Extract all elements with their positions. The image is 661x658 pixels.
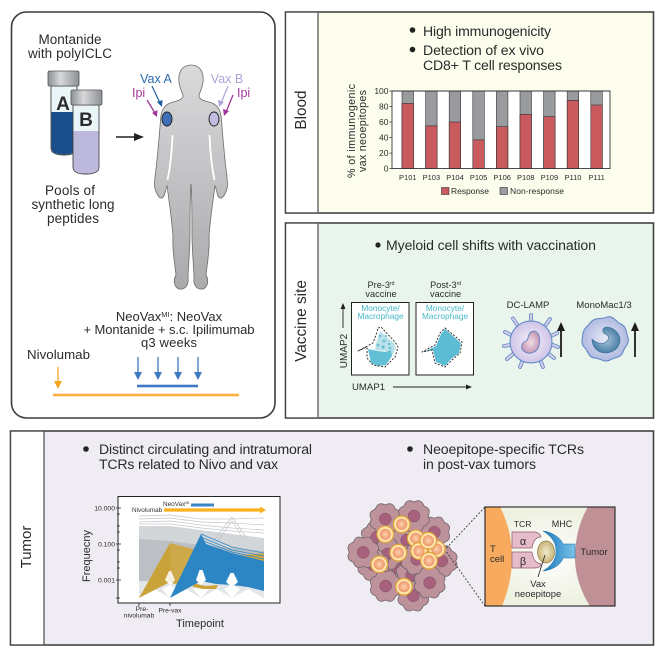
axis: y tick labels: 20 [379, 148, 389, 158]
label: schedule: q3 weeks [141, 335, 198, 350]
axis: x labels: Pre-vax [158, 608, 182, 614]
bullet text: CD8 detection: CD8+ T cell responses [423, 57, 562, 73]
icon: injection site B [209, 112, 219, 126]
axis: y tick labels [374, 86, 389, 174]
axis: UMAP2: UMAP2 [339, 333, 350, 368]
panel: vaccine site [286, 223, 654, 418]
axis: x labels: P101 [399, 173, 417, 182]
label: post-3rd vaccine: vaccine [430, 289, 461, 299]
receptor: TCR alpha: α [520, 536, 527, 548]
molecule: vax neoepitope [538, 541, 554, 563]
label: vax neoepitope: Vax [530, 578, 546, 589]
axis: x labels: P110 [565, 173, 581, 182]
plot: UMAP post: Monocyte/ [426, 303, 465, 313]
bullet text: CD8 detection: Detection of ex vivo [423, 42, 544, 58]
label: pre-3rd vaccine [365, 280, 397, 299]
label: NeoVaxMI regimen: MI [161, 310, 170, 319]
panel: blood [286, 12, 654, 213]
timeline: NeoVax bar: MI [185, 501, 189, 505]
icon: human body [154, 65, 228, 289]
axis: x labels: P111 [588, 173, 605, 182]
label: post-3rd vaccine: rd [457, 281, 461, 287]
label: MHC: MHC [552, 519, 573, 529]
axis: x labels: P103 [423, 173, 440, 182]
label: TCR: TCR [514, 519, 531, 529]
axis: x labels: Pre- [136, 606, 148, 613]
axis: UMAP2 [339, 303, 350, 368]
axis: y tick labels: 0.100 [98, 542, 115, 548]
label: polyICLC: with polyICLC [27, 46, 112, 61]
arrow: Ipi left [147, 100, 158, 117]
timeline: NeoVax bar: NeoVax [163, 501, 185, 508]
arrow: nivolumab start [54, 367, 62, 389]
cell: T cell: cell [490, 554, 504, 565]
bullet text: neoepitope TCRs [407, 441, 584, 472]
label: MonoMac1/3: MonoMac1/3 [576, 300, 632, 311]
axis: x labels: P108 [517, 173, 535, 182]
label: Vax B: Vax B [211, 72, 243, 86]
label: montanide: Montanide [38, 32, 102, 47]
label: synthetic long: synthetic long [32, 197, 114, 212]
label: pools: Pools of [45, 183, 95, 198]
bullet text: distinct TCRs [83, 441, 312, 472]
timeline: nivolumab bar [53, 394, 239, 396]
label: Blood: Blood [293, 90, 310, 130]
icon: dendritic cell [504, 315, 558, 367]
icon: monocyte [582, 317, 628, 361]
axis: x labels: P104 [446, 173, 464, 182]
icon: tube B [71, 90, 102, 174]
panel: vaccine regimen [12, 12, 275, 418]
marks: white gaps [196, 570, 206, 585]
axis: y title: Frequecny [81, 530, 93, 582]
molecule: MHC [543, 531, 575, 571]
arrow: Vax A [152, 86, 162, 107]
label: post-3rd vaccine: Post-3 [430, 280, 457, 290]
plot: UMAP post [416, 302, 474, 375]
axis: UMAP1 [352, 382, 472, 393]
label: Vax A: Vax A [140, 72, 173, 86]
label: DC-LAMP: DC-LAMP [507, 300, 549, 311]
axis: y tick labels: 0.001 [98, 578, 115, 584]
axis: y tick labels [94, 506, 115, 584]
legend: Non-response [510, 186, 564, 196]
arrow: MonoMac up [631, 322, 639, 357]
label: pre-3rd vaccine: vaccine [365, 289, 397, 299]
label: vax neoepitope [515, 578, 561, 599]
chart: immunogenic neoepitopes stacked bars [346, 83, 610, 196]
label: Ipi right: Ipi [237, 86, 250, 100]
label: post-3rd vaccine [430, 280, 461, 299]
bullet text: neoepitope TCRs: Neoepitope-specific TCRs [423, 441, 584, 457]
plot: UMAP pre: Macrophage [357, 311, 404, 321]
arrow: DC-LAMP up [557, 322, 565, 357]
arrow: Vax B [218, 86, 228, 107]
label: vax neoepitope: neoepitope [515, 588, 561, 599]
bullet text: myeloid shifts: Myeloid cell shifts with vaccination [386, 237, 596, 253]
bullet text: distinct TCRs: TCRs related to Nivo and vax [99, 456, 278, 472]
lines: grey clonotypes [139, 537, 264, 581]
arrow: Ipi right [223, 95, 233, 116]
axis: x labels [399, 173, 605, 182]
axis: x labels: P109 [541, 173, 558, 182]
axis: y title: vax neoepitopes [357, 90, 369, 172]
label: NeoVaxMI regimen: : NeoVax [170, 309, 223, 324]
cell: tumor: Tumor [580, 547, 608, 558]
receptor: TCR beta: β [520, 556, 526, 568]
bullet text: distinct TCRs: Distinct circulating and intratumoral [99, 441, 312, 457]
plot: UMAP pre: Monocyte/ [361, 303, 400, 313]
axis: x title: Timepoint [176, 618, 224, 630]
lines: nivolumab-associated gold [139, 543, 170, 598]
label: Ipi left: Ipi [132, 86, 145, 100]
lines: vaccine-associated blue [170, 534, 264, 598]
bullet text: immunogenicity: High immunogenicity [423, 23, 552, 39]
cell: T cell: T [490, 544, 496, 555]
timeline: NeoVax bar [163, 501, 214, 508]
icon: injection site A [162, 112, 172, 126]
arrow: tubes to patient [116, 133, 144, 141]
legend: Response [451, 186, 489, 196]
axis: y title: % of immunogenic [346, 83, 358, 178]
axis: y tick labels: 0 [384, 164, 389, 174]
panel: tumor [10, 431, 654, 645]
label: NeoVaxMI regimen: NeoVax [116, 309, 161, 324]
diagram: TCR MHC interaction [485, 507, 615, 606]
timeline: nivolumab arrow [132, 506, 266, 514]
label: Nivolumab: Nivolumab [27, 347, 90, 362]
icon: tube A: A [56, 94, 70, 115]
cell: T cell [485, 507, 512, 606]
bullet text: neoepitope TCRs: in post-vax tumors [423, 456, 536, 472]
bullet text: CD8 detection [410, 42, 562, 73]
icon: tumor cell cluster [348, 501, 457, 611]
axis: y tick labels: 40 [379, 133, 389, 143]
chart: TCR frequency parallel lines [81, 496, 280, 630]
axis: y tick labels: 80 [379, 102, 389, 112]
axis: y tick labels: 10.000 [94, 506, 115, 512]
icon: tube A [48, 71, 79, 155]
axis: y tick labels: 60 [379, 117, 389, 127]
timeline: vaccine bar [137, 385, 198, 387]
axis: x labels: nivolumab [124, 612, 155, 620]
timeline: nivolumab arrow: Nivolumab [132, 507, 163, 514]
icon: tube B: B [79, 110, 93, 131]
plot: UMAP post: Macrophage [422, 311, 468, 321]
axis: x labels [124, 606, 182, 620]
label: Tumor: Tumor [18, 526, 35, 568]
bars: response [402, 100, 602, 169]
label: pre-3rd vaccine: rd [390, 281, 395, 287]
axis: x labels: P105 [470, 173, 487, 182]
axis: UMAP1: UMAP1 [352, 382, 385, 393]
plot: UMAP pre [352, 302, 409, 375]
label: Vaccine site: Vaccine site [293, 280, 310, 362]
legend [442, 186, 564, 196]
arrows: vaccine doses [134, 357, 202, 380]
lines: faint low frequency [139, 581, 264, 598]
bars: non-response [402, 91, 602, 169]
axis: y title [346, 83, 369, 178]
axis: y tick labels: 100 [374, 86, 389, 96]
label: regimen detail: + Montanide + s.c. Ipilimumab [84, 322, 254, 337]
axis: x labels: P106 [493, 173, 511, 182]
label: peptides: peptides [47, 211, 99, 226]
label: pre-3rd vaccine: Pre-3 [368, 280, 390, 290]
